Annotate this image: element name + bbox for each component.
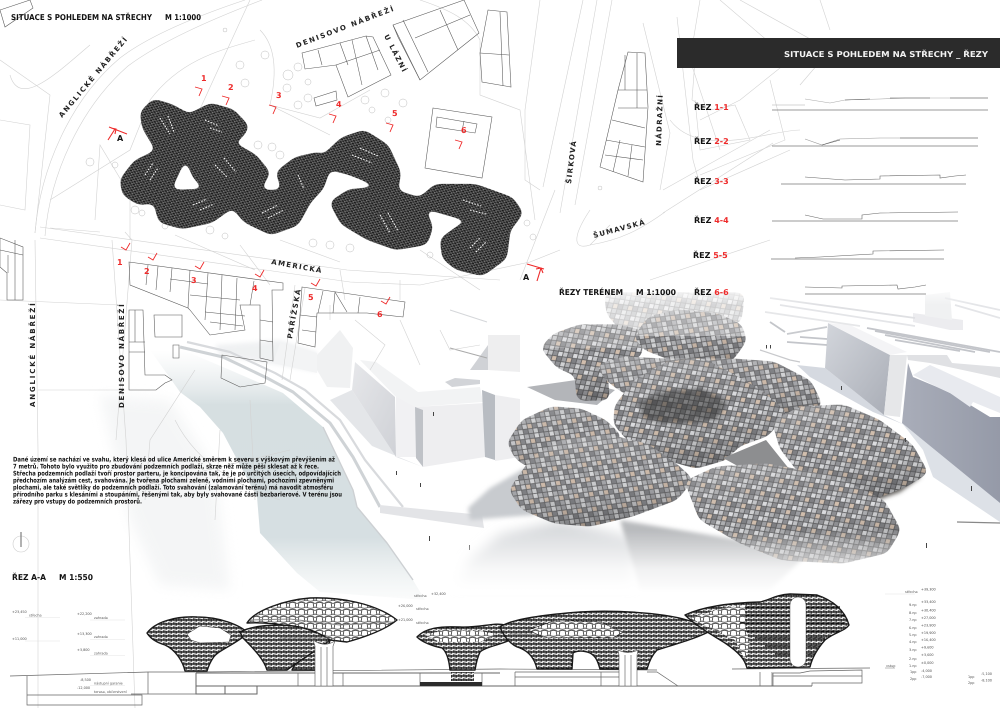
- interior floor lines: [250, 619, 620, 638]
- shell: tower lobe: [685, 594, 849, 668]
- section 5-5: ŘEZ 5-5: [693, 250, 728, 260]
- underground structure lines: [10, 668, 870, 705]
- level labels right: +33,400: [921, 600, 936, 604]
- level labels right: 8.np: [909, 611, 917, 615]
- level labels left: +23,450: [12, 610, 27, 614]
- plan: street names: U LÁZNÍ: [382, 33, 410, 75]
- arrow: section A west: A: [117, 134, 124, 143]
- level labels right: 2pp: [968, 681, 974, 685]
- level labels right: -7,000: [921, 675, 932, 679]
- level labels middle: +26,000: [398, 604, 413, 608]
- header bar: [677, 38, 1000, 68]
- plan: red section markers and numbers: 6: [461, 126, 467, 135]
- building shells in section: [147, 594, 849, 671]
- plan: street names: DENISOVO NÁBŘEŽÍ: [117, 302, 126, 408]
- river water: [150, 350, 425, 600]
- roof light openings: [145, 116, 486, 252]
- arrow: section A east: [523, 264, 544, 282]
- shell: long east lobe: [500, 611, 712, 669]
- level labels left: nástupní garanie: [94, 682, 123, 686]
- pavilion roof: rear middle lobe: [599, 356, 820, 414]
- section 1-1: ŘEZ 1-1: [694, 102, 729, 112]
- top fade of render: [550, 285, 1000, 305]
- embankment stripes: [180, 342, 413, 580]
- plan: red section markers and numbers: 5: [308, 293, 314, 302]
- plan: surrounding building outlines: [0, 0, 648, 390]
- section 5-5: [693, 250, 944, 260]
- header bar: SITUACE S POHLEDEM NA STŘECHY _ ŘEZY: [784, 49, 988, 59]
- stem below ground: [451, 672, 474, 681]
- plan: red section markers and numbers: 1: [201, 74, 207, 83]
- level labels right: 2.np: [909, 657, 917, 661]
- level labels right: +27,000: [921, 616, 936, 620]
- plan: red section markers and numbers: 5: [392, 109, 398, 118]
- text block: project description: [13, 456, 342, 506]
- plan: red section markers and numbers: 4: [252, 284, 258, 293]
- plan: street names: ANGLICKÉ NÁBŘEŽÍ: [28, 301, 37, 407]
- level labels left: +3,800: [77, 648, 90, 652]
- level labels right: 1pp: [910, 670, 916, 674]
- level labels right: +30,400: [921, 608, 936, 612]
- section 3-3: [694, 175, 966, 186]
- plaza between the lobes: [723, 440, 800, 476]
- pavilion roof: west lobe: [508, 406, 620, 466]
- text block: project description: zářezy pro vstupy do podzemních prostorů.: [13, 498, 142, 506]
- section 6-6: ŘEZ 6-6: [694, 287, 729, 297]
- lighter mesh on tower shoulder: [690, 605, 750, 660]
- pavilion roof: east lobe: [774, 404, 926, 498]
- shell: west lobe: [147, 617, 248, 671]
- hollow in west lobe: [187, 626, 231, 643]
- heading: section A-A: M 1:550: [59, 573, 93, 582]
- level labels left: +22,200: [77, 612, 92, 616]
- vertical capsule in tower: [790, 597, 806, 667]
- pavilion roof: south-east lobe: [686, 464, 900, 564]
- plan: red section markers and numbers: 2: [228, 83, 234, 92]
- panel: perspective site render: [100, 285, 1000, 600]
- heading: section A-A: ŘEZ A-A: [12, 572, 47, 582]
- level labels right: 4.np: [909, 640, 917, 644]
- level labels right: -5,100: [981, 672, 992, 676]
- level labels right: 1.np: [909, 664, 917, 668]
- plan: red section markers and numbers: 2: [144, 267, 150, 276]
- level labels left: -12,000: [77, 686, 90, 690]
- arrow: section A east: A: [523, 273, 530, 282]
- vertical core west: [313, 640, 335, 686]
- level labels middle: [398, 592, 446, 625]
- shell: central small lobe: [417, 624, 510, 670]
- plan: red section markers and numbers: 6: [377, 310, 383, 319]
- blocks on the embankment: [317, 330, 353, 388]
- plan: street names: DENISOVO NÁBŘEŽÍ: [294, 3, 397, 50]
- level labels right: +19,900: [921, 631, 936, 635]
- pavilion roof: north lobe: [636, 310, 746, 359]
- plan: red section markers and numbers: 1: [117, 258, 123, 267]
- level labels right: +3,600: [921, 653, 934, 657]
- building block west: [352, 335, 520, 467]
- terraced stripes north-east: [450, 298, 1000, 362]
- arrow: section A west: [108, 127, 127, 143]
- text block: project description: předchozím analýzám cest, svahována. Je tvořena plochami zeleně, vodními plochami, pochozími zpevněnými: [13, 476, 334, 484]
- pavilion roof: north-west lobe: [543, 324, 643, 401]
- level labels right: -8,100: [981, 678, 992, 682]
- shadow of the embankment block: [330, 390, 423, 467]
- level labels right: 6.np: [909, 626, 917, 630]
- section 2-2: [694, 136, 978, 146]
- mesh on central lobe: [425, 630, 497, 642]
- pavilion roof: south-west lobe: [510, 434, 691, 526]
- vertical core east: [618, 650, 638, 686]
- panel: longitudinal section A-A: [10, 588, 992, 705]
- plan: green roof lobes: [115, 95, 525, 280]
- level labels middle: střecha: [416, 607, 429, 611]
- eastern buildings: [797, 292, 1000, 523]
- level labels right: +23,900: [921, 624, 936, 628]
- level labels right: +16,400: [921, 638, 936, 642]
- shell: lower dome leg: [292, 640, 330, 670]
- plan: red section markers and numbers: 3: [276, 91, 282, 100]
- section 2-2: ŘEZ 2-2: [694, 136, 729, 146]
- plan: street names: NÁDRAŽNÍ: [654, 93, 665, 146]
- level labels left: [12, 610, 128, 694]
- panel: terrain sections: [559, 98, 988, 297]
- dark floor slabs in tower: [740, 607, 845, 654]
- plan: street names: [28, 3, 665, 408]
- level labels left: zahrada: [94, 635, 108, 639]
- ground shadows under the pavilions: [468, 468, 535, 520]
- level labels right: +39,300: [921, 588, 936, 592]
- level labels right: ±0,000: [921, 661, 934, 665]
- level labels right: 5.np: [909, 633, 917, 637]
- level labels right: -4,000: [921, 669, 932, 673]
- plan: red section markers and numbers: 3: [191, 276, 197, 285]
- level labels right: 2pp: [910, 677, 916, 681]
- plan: street names: AMERICKÁ: [271, 257, 324, 275]
- text block: project description: Střecha podzemních podlaží tvoří prostor parteru, je koncipována tak, že je po určitých úsecích, odpovídajících: [13, 470, 341, 478]
- level labels left: střecha: [29, 614, 42, 618]
- level labels right: 1pp: [968, 675, 974, 679]
- section 1-1: [694, 98, 988, 112]
- text block: project description: Dané území se nachází ve svahu, který klesá od ulice Americké směrem k severu s výškovým převýšením až: [13, 456, 335, 464]
- retaining wall: [380, 505, 484, 528]
- level labels right: vstup: [886, 664, 895, 668]
- plan: red section markers and numbers: [117, 74, 467, 319]
- plan: street names: ŠIRKOVÁ: [564, 138, 578, 184]
- text block: project description: plochami, ale také světlíky do podzemních podlaží. Toto svahování (zalamování terénu) má navodit atmosféru: [13, 484, 333, 492]
- level labels left: -8,500: [80, 678, 91, 682]
- pavilion roof: central lobe with hollow: [614, 358, 785, 468]
- plan: trees: [86, 28, 602, 258]
- level labels right: +9,600: [921, 646, 934, 650]
- level labels left: terasa, občerstvení: [94, 690, 128, 694]
- section 3-3: ŘEZ 3-3: [694, 176, 729, 186]
- pavilion roof: far lobe: [605, 292, 744, 330]
- text block: project description: 7 metrů. Tohoto bylo využito pro zbudování podzemních podlaží, skrze něž může pěší sklesat až k řece.: [13, 462, 319, 470]
- level labels right: [885, 588, 992, 685]
- title: site plan: SITUACE S POHLEDEM NA STŘECHY: [11, 12, 152, 22]
- hollow lobes with planting: [528, 620, 623, 638]
- icon: north compass: [13, 532, 29, 552]
- plan: street names: ŠUMAVSKÁ: [592, 217, 648, 240]
- underside shadow of east lobe: [860, 476, 922, 502]
- heading: terrain sections: M 1:1000: [636, 288, 676, 297]
- section 4-4: [694, 212, 958, 225]
- section 6-6: [694, 285, 926, 297]
- level labels left: zahrada: [94, 652, 108, 656]
- dark floor slab: [420, 682, 482, 686]
- shell: upper dome: [247, 598, 397, 642]
- scale: site plan: M 1:1000: [165, 13, 201, 22]
- soft building shadows on the left bank: [100, 395, 230, 590]
- level labels left: +13,300: [77, 632, 92, 636]
- level labels middle: +21,000: [398, 618, 413, 622]
- heading: section A-A: [12, 572, 93, 582]
- level labels middle: střecha: [414, 594, 427, 598]
- level labels middle: +32,400: [431, 592, 446, 596]
- shell: lower dome: [240, 625, 330, 670]
- level labels right: 9.np: [909, 603, 917, 607]
- bottom fog fade: [440, 530, 920, 595]
- plan: street names: ANGLICKÉ NÁBŘEŽÍ: [57, 34, 130, 119]
- text block: project description: přírodního parku s klesáními a stoupáními, řešenými tak, aby byly svahované části bezbarierové. V terénu jsou: [13, 490, 342, 498]
- scale figures: [396, 345, 972, 550]
- plan: red section markers and numbers: 4: [336, 100, 342, 109]
- plan: street names: PAŘÍŽSKÁ: [285, 287, 303, 339]
- level labels left: +11,000: [12, 637, 27, 641]
- level labels right: 3.np: [909, 648, 917, 652]
- level labels right: střecha: [905, 590, 918, 594]
- section 4-4: ŘEZ 4-4: [694, 215, 729, 225]
- level labels middle: střecha: [416, 621, 429, 625]
- level labels right: 7.np: [909, 618, 917, 622]
- heading: terrain sections: ŘEZY TERÉNEM: [559, 287, 623, 297]
- level labels left: zahrada: [94, 616, 108, 620]
- heading: terrain sections: [559, 287, 676, 297]
